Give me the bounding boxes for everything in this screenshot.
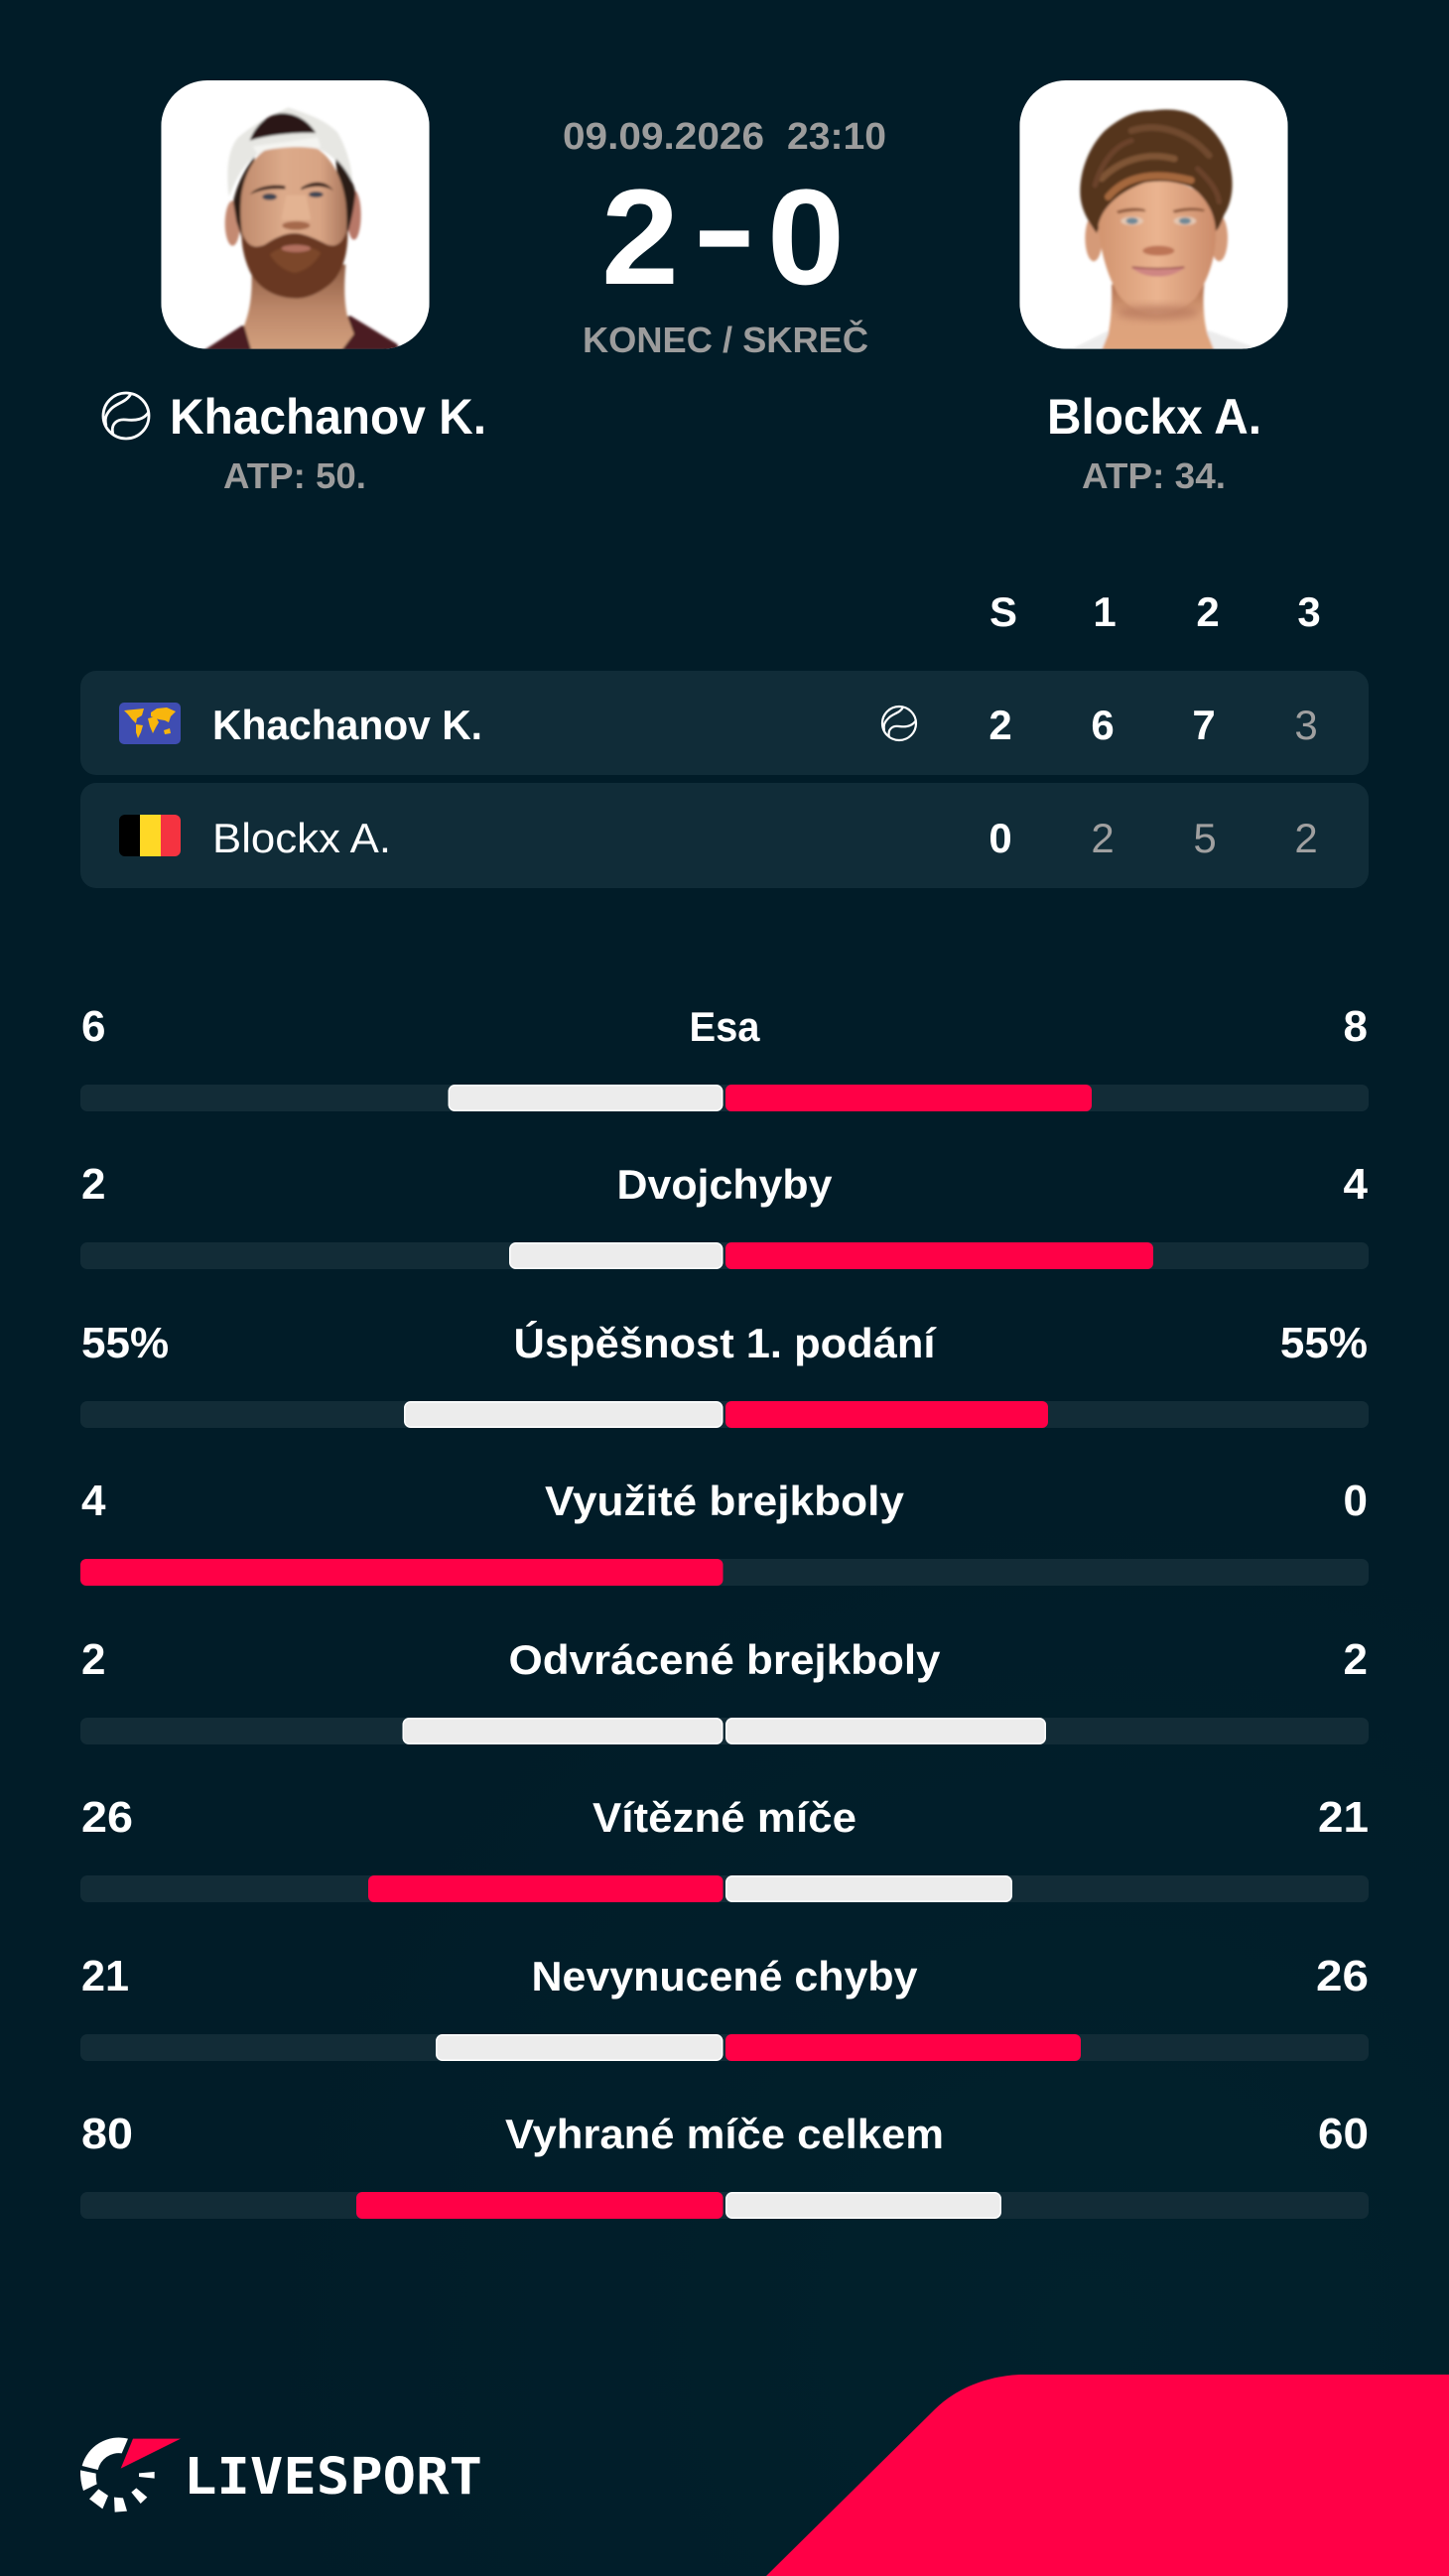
- scores: [988, 815, 1318, 861]
- stat: Esa: 8: [1344, 1002, 1368, 1051]
- logo: Livesport: [80, 2438, 482, 2512]
- row: Khachanov: [80, 671, 1369, 775]
- stat: unforced errors: 21: [81, 1952, 129, 2000]
- player name: Khachanov K.: [212, 702, 482, 748]
- stat: break points won: [80, 1477, 1369, 1586]
- final score 2-0: 0: [767, 162, 845, 314]
- ranking: ATP 50: ATP: 50.: [223, 455, 366, 496]
- stat: first serve: 55%: [1280, 1319, 1368, 1367]
- panel: match header: [103, 80, 1288, 496]
- player photo: Khachanov: [161, 80, 430, 350]
- stat: first serve: 55%: [81, 1319, 169, 1367]
- stat: Dvojchyby: Dvojchyby: [617, 1161, 833, 1208]
- match status: KONEC / SKREČ: [583, 319, 868, 360]
- stat: total points won: 80: [81, 2110, 133, 2158]
- stat: total points won: 60: [1318, 2110, 1369, 2158]
- final score 2-0: 2: [601, 162, 679, 314]
- final score 2-0: -: [693, 151, 756, 303]
- scores: 3: [1294, 702, 1318, 748]
- match date and time: 23:10: [787, 116, 886, 158]
- player name: Blockx A.: Blockx A.: [1047, 389, 1261, 445]
- scores: 6: [1091, 702, 1115, 748]
- column headers: 1: [1093, 588, 1117, 635]
- stat: Dvojchyby: 2: [81, 1160, 105, 1209]
- match date and time: 09.09.2026: [563, 116, 764, 158]
- column headers: 2: [1196, 588, 1220, 635]
- scores: 5: [1193, 815, 1217, 861]
- panel: statistics: [80, 1002, 1369, 2219]
- stat: break points won: 4: [81, 1477, 106, 1525]
- stat: unforced errors: [80, 1952, 1369, 2061]
- column headers: [989, 588, 1321, 635]
- stat: break points saved: 2: [81, 1635, 105, 1684]
- stat: winners: 26: [81, 1793, 133, 1842]
- icon: serve ball: [882, 707, 916, 740]
- stat: break points saved: 2: [1344, 1635, 1368, 1684]
- stat: break points saved: [80, 1635, 1369, 1744]
- match date and time: [563, 116, 886, 158]
- ranking: ATP 34: ATP: 34.: [1082, 455, 1226, 496]
- icon: gauge mark: [80, 2438, 181, 2512]
- scores: 2: [1091, 815, 1115, 861]
- stat: Dvojchyby: 4: [1344, 1160, 1369, 1209]
- stat: Esa: [80, 1002, 1369, 1111]
- stat: unforced errors: Nevynucené chyby: [532, 1953, 918, 1999]
- stat: break points won: Využité brejkboly: [545, 1478, 905, 1524]
- stat: first serve: Úspěšnost 1. podání: [514, 1319, 937, 1366]
- flag: world: [119, 703, 181, 744]
- panel: set scoreboard: [80, 588, 1369, 888]
- wordmark: LIVESPORT: [184, 2448, 482, 2507]
- stat: winners: 21: [1318, 1793, 1369, 1842]
- icon: tennis ball serve indicator: [103, 393, 149, 439]
- stat: total points won: [80, 2110, 1369, 2219]
- row: Blockx: [80, 783, 1369, 888]
- stat: first serve: [80, 1319, 1369, 1428]
- column headers: S: [989, 588, 1017, 635]
- red corner shape: [766, 2375, 1449, 2576]
- stat: Esa: 6: [81, 1002, 105, 1051]
- player name: Khachanov K.: Khachanov K.: [170, 389, 486, 445]
- stat: unforced errors: 26: [1316, 1952, 1369, 2000]
- player photo: Blockx: [1019, 80, 1288, 350]
- stat: winners: [80, 1793, 1369, 1902]
- stat: winners: Vítězné míče: [593, 1794, 856, 1841]
- stat: break points saved: Odvrácené brejkboly: [508, 1636, 941, 1683]
- player name: Blockx A.: [212, 815, 391, 861]
- stat: total points won: Vyhrané míče celkem: [505, 2111, 944, 2157]
- flag: Belgium: [119, 815, 181, 856]
- stat: Esa: Esa: [689, 1003, 760, 1050]
- scores: 7: [1192, 702, 1216, 748]
- column headers: 3: [1297, 588, 1321, 635]
- scores: 2: [988, 702, 1012, 748]
- scores: 2: [1294, 815, 1318, 861]
- final score 2-0: [601, 151, 845, 314]
- scores: 0: [988, 815, 1012, 861]
- stat: break points won: 0: [1344, 1477, 1368, 1525]
- stat: Dvojchyby: [80, 1160, 1369, 1269]
- scores: [988, 702, 1318, 748]
